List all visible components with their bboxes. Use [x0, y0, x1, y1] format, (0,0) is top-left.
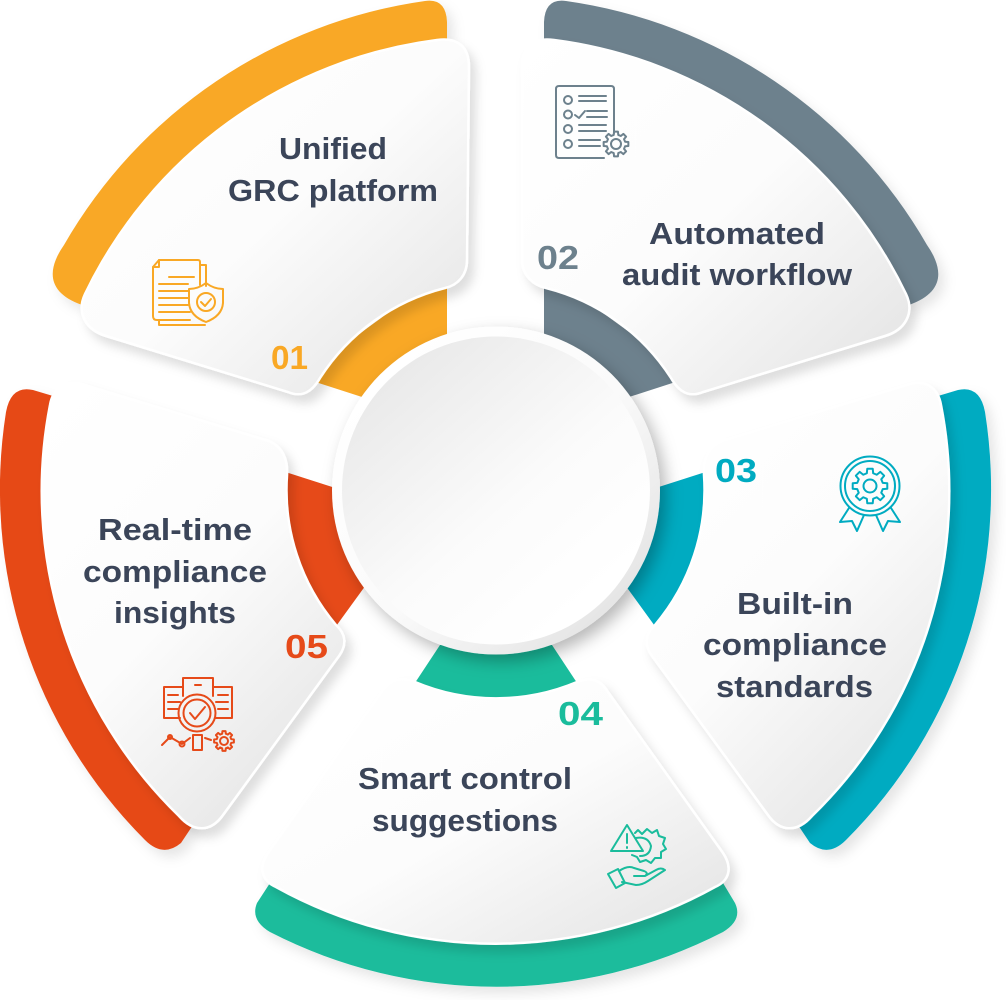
panel: 05 real-time compliance insights: [0, 383, 371, 850]
icon: award badge with gear: [840, 456, 900, 531]
teal inner band: [620, 468, 720, 640]
heading 04: [358, 761, 572, 838]
panel: 01 unified GRC platform: [53, 1, 469, 397]
orange inner band: [300, 270, 447, 397]
central circle: [332, 326, 660, 654]
card 05: [42, 383, 344, 828]
heading 01: [228, 131, 438, 208]
grey inner band: [544, 270, 691, 397]
heading 03: standards: [716, 669, 873, 704]
heading 01: Unified: [279, 131, 387, 166]
heading 03: [703, 586, 887, 704]
heading 04: Smart control: [358, 761, 572, 796]
heading 05: [83, 512, 267, 630]
number 02: 02: [537, 239, 579, 276]
heading 02: audit workflow: [622, 257, 853, 292]
number 04: 04: [558, 695, 604, 732]
card 02: [522, 39, 909, 394]
card 03: [647, 383, 949, 828]
icon: hand with warning and gear: [608, 825, 666, 888]
card 01: [82, 39, 469, 394]
heading 02: Automated: [649, 216, 825, 251]
panel: 04 smart control suggestions: [255, 645, 737, 987]
panel: 02 automated audit workflow: [522, 1, 938, 397]
number 05: 05: [285, 628, 328, 665]
heading 03: Built-in: [737, 586, 853, 621]
teal outer band: [798, 389, 991, 850]
heading 05: Real-time: [98, 512, 252, 547]
heading 05: insights: [114, 595, 236, 630]
heading 01: GRC platform: [228, 173, 438, 208]
grey outer band: [544, 1, 938, 305]
heading 05: compliance: [83, 554, 267, 589]
heading 03: compliance: [703, 627, 887, 662]
card 04: [262, 679, 729, 944]
number 03: 03: [715, 452, 757, 489]
panel: 03 built-in compliance standards: [620, 383, 991, 850]
orange outer band: [53, 1, 447, 305]
icon: documents with magnifier, chart and gear: [162, 678, 234, 751]
icon: checklist with gear: [556, 86, 628, 158]
heading 02: [622, 216, 853, 292]
icon: document with shield: [153, 260, 223, 325]
red inner band: [271, 468, 371, 640]
green inner band: [405, 645, 587, 698]
number 01: 01: [271, 339, 308, 376]
heading 04: suggestions: [372, 803, 558, 838]
red outer band: [0, 389, 193, 850]
green outer band: [255, 883, 737, 987]
